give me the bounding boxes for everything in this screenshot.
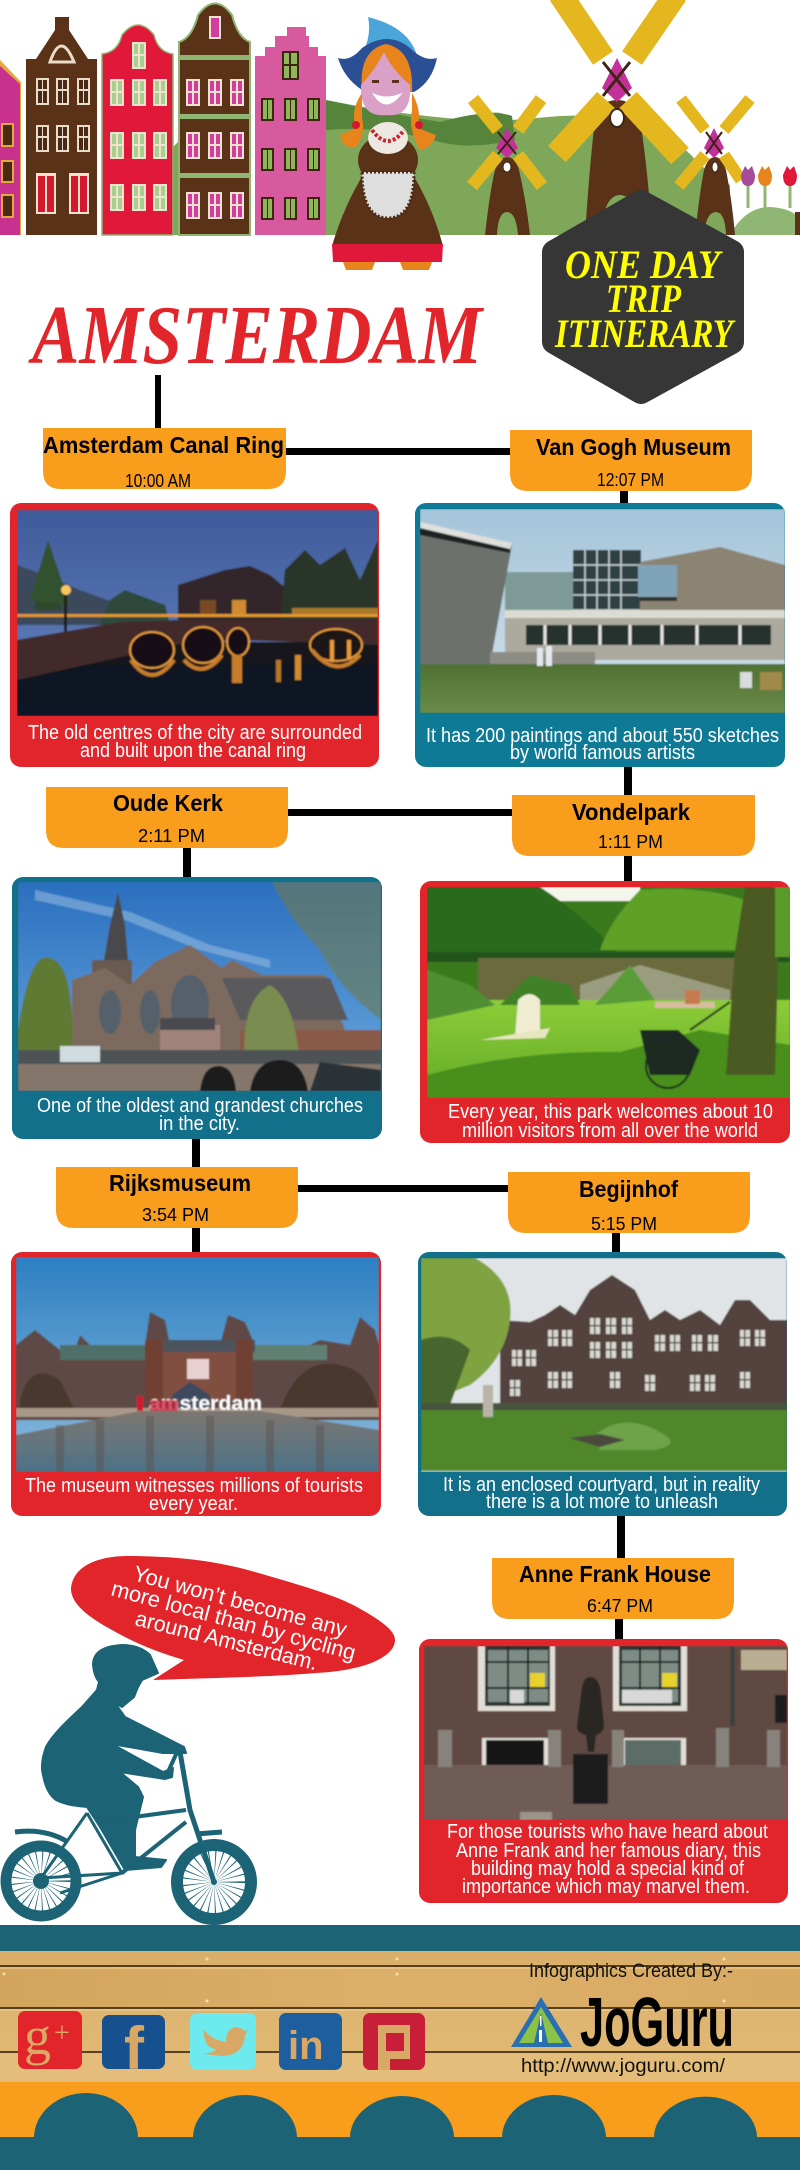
card: Anne Frank House: importance which may marvel them. (462, 1876, 750, 1898)
windmill: right (679, 99, 750, 235)
house: dark brown with green trim (179, 4, 250, 235)
header illustration: houses, girl and windmills (0, 0, 800, 270)
icon: linkedin (279, 2013, 342, 2070)
footer top band (0, 1925, 800, 1951)
badge: one day trip itinerary: ONE DAY (565, 242, 723, 287)
icon: google plus: g (24, 2006, 51, 2066)
card: Rijksmuseum (11, 1252, 381, 1516)
card: Oude Kerk: in the city. (159, 1113, 240, 1135)
footer (0, 1925, 800, 2170)
house: red (102, 25, 173, 235)
rider (42, 1645, 186, 1870)
website url: http://www.joguru.com/ (521, 2056, 726, 2077)
card: Vondelpark (420, 881, 790, 1143)
girl in Dutch costume (332, 17, 443, 270)
card: Van Gogh Museum: by world famous artists (510, 742, 695, 764)
card: Rijksmuseum: every year. (149, 1493, 238, 1515)
card: Anne Frank House (419, 1639, 788, 1903)
orange band with teal arches (0, 2082, 800, 2170)
stop: Rijksmuseum (56, 1167, 298, 1228)
icon: facebook (102, 2015, 165, 2082)
logo: JoGuru (511, 1983, 734, 2061)
icon: google plus (18, 2006, 82, 2069)
card: Anne Frank House: building may hold a special kind of (471, 1858, 744, 1880)
card: Oude Kerk: One of the oldest and grandest churches (37, 1095, 363, 1117)
icon: pinterest-style P (363, 2013, 425, 2070)
card: Oude Kerk (12, 877, 382, 1139)
stop: Begijnhof: Begijnhof (579, 1176, 678, 1202)
icon: google plus: + (54, 2018, 70, 2049)
green hills (170, 100, 800, 235)
card: Vondelpark: million visitors from all over the world (462, 1120, 758, 1142)
stop: Vondelpark (512, 795, 755, 856)
photo: Rijksmuseum and reflecting pool: I amsterdam (137, 1393, 262, 1415)
badge: one day trip itinerary: ITINERARY (554, 311, 736, 356)
route connector lines (155, 375, 632, 1640)
card: canal ring: The old centres of the city are surrounded (28, 722, 362, 744)
stop: Amsterdam Canal Ring: 10:00 AM (125, 471, 191, 491)
speech bubble: more local than by cycling (109, 1576, 359, 1665)
photo: Rijksmuseum and reflecting pool (16, 1257, 379, 1472)
bicycle frame (15, 1750, 222, 1893)
stop: Anne Frank House: 6:47 PM (587, 1596, 653, 1616)
stop: Amsterdam Canal Ring (43, 428, 286, 491)
stop: Van Gogh Museum (510, 430, 752, 491)
stop: Rijksmuseum: 3:54 PM (142, 1205, 209, 1225)
badge: one day trip itinerary (554, 202, 736, 392)
house: magenta (0, 60, 21, 235)
wood planks (0, 1951, 800, 2082)
stop: Begijnhof: 5:15 PM (591, 1214, 657, 1234)
stop: Van Gogh Museum: 12:07 PM (597, 470, 664, 490)
tulips (741, 166, 797, 208)
stop: Rijksmuseum: Rijksmuseum (109, 1170, 251, 1196)
photo: park lake (427, 887, 790, 1098)
stop: Anne Frank House: Anne Frank House (519, 1561, 711, 1587)
front wheel (177, 1845, 251, 1919)
stop: Amsterdam Canal Ring: Amsterdam Canal Ring (43, 432, 284, 458)
card: canal ring: and built upon the canal ring (80, 740, 306, 762)
icon: twitter (190, 2013, 256, 2070)
card: Begijnhof: there is a lot more to unleash (486, 1491, 718, 1513)
house: brown (26, 17, 97, 235)
rear wheel (6, 1846, 76, 1916)
stop: Begijnhof (508, 1172, 750, 1234)
card: Rijksmuseum: The museum witnesses millions of tourists (25, 1475, 363, 1497)
card: canal ring (10, 503, 379, 767)
card: Begijnhof (418, 1252, 787, 1516)
card: Anne Frank House: For those tourists who have heard about (447, 1821, 768, 1843)
stop: Anne Frank House (492, 1558, 734, 1619)
title: AMSTERDAM (28, 289, 485, 382)
badge: one day trip itinerary: TRIP (606, 276, 681, 321)
photo: Anne Frank statue (424, 1646, 787, 1820)
speech bubble: around Amsterdam. (133, 1606, 320, 1675)
photo: canal at dusk (17, 510, 378, 716)
credit text: Infographics Created By:- (529, 1961, 733, 1982)
photo: old church (18, 882, 381, 1091)
stop: Oude Kerk: Oude Kerk (113, 790, 223, 816)
photo: courtyard houses (421, 1258, 787, 1472)
photo: museum and lawn (420, 509, 785, 713)
card: Anne Frank House: Anne Frank and her famous diary, this (456, 1840, 761, 1862)
icon: linkedin: in (288, 2024, 324, 2068)
icon: facebook: f (124, 2015, 145, 2082)
windmill: large centre (557, 0, 680, 235)
windmill: left (472, 99, 542, 235)
stop: Vondelpark: 1:11 PM (598, 832, 663, 852)
card: Begijnhof: It is an enclosed courtyard, but in reality (443, 1474, 760, 1496)
card: Van Gogh Museum (415, 503, 785, 767)
stop: Vondelpark: Vondelpark (572, 799, 690, 825)
card: Vondelpark: Every year, this park welcomes about 10 (448, 1101, 773, 1123)
stop: Oude Kerk (46, 787, 288, 848)
stop: Van Gogh Museum: Van Gogh Museum (536, 434, 731, 460)
stop: Oude Kerk: 2:11 PM (138, 826, 205, 846)
speech bubble (71, 1556, 395, 1680)
house: pink stepped gable (255, 27, 326, 235)
speech bubble: You won’t become any (131, 1561, 350, 1642)
cyclist silhouette (6, 1645, 251, 1919)
